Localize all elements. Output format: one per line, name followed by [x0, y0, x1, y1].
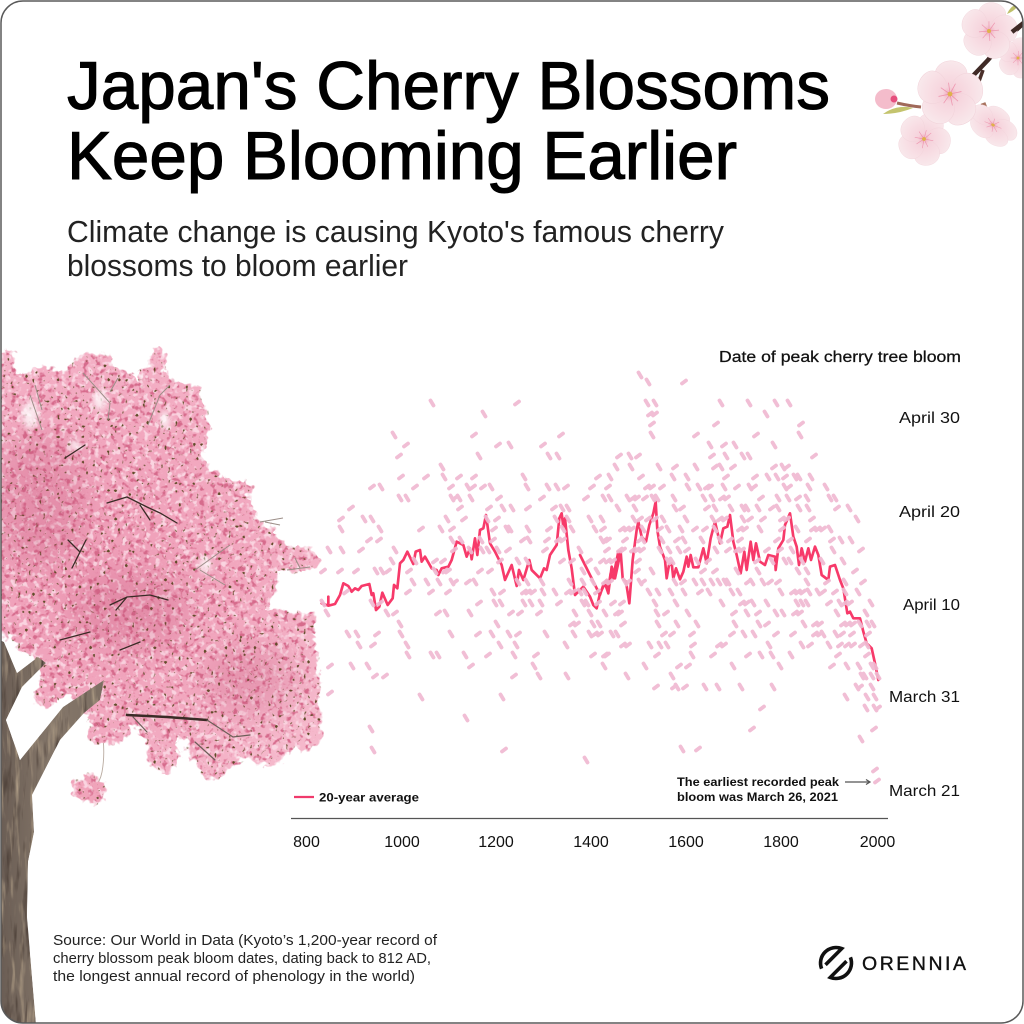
x axis with year labels: 1400 [573, 834, 609, 851]
scatter: yearly bloom dates drawn as petals [321, 372, 880, 782]
title [67, 48, 830, 194]
x axis with year labels: 1000 [384, 834, 420, 851]
y axis date labels: April 20 [899, 504, 960, 521]
callout: earliest recorded bloom [677, 775, 870, 804]
title: Keep Blooming Earlier [67, 118, 737, 194]
y axis date labels: April 30 [899, 410, 960, 427]
x axis with year labels: 1600 [668, 834, 704, 851]
y axis title: Date of peak cherry tree bloom [719, 349, 961, 366]
callout: earliest recorded bloom: bloom was March 26, 2021 [677, 790, 838, 804]
subtitle: blossoms to bloom earlier [67, 249, 408, 283]
x axis with year labels: 800 [293, 834, 320, 851]
line chart: 20-year average of bloom date [322, 502, 878, 680]
x axis with year labels: 1200 [478, 834, 514, 851]
x axis with year labels: 1800 [763, 834, 799, 851]
y axis date labels: March 21 [889, 783, 960, 800]
y axis date labels: April 10 [903, 597, 960, 614]
subtitle: Climate change is causing Kyoto's famous cherry [67, 215, 725, 249]
legend: 20-year average: 20-year average [319, 790, 419, 804]
callout: earliest recorded bloom: The earliest recorded peak [677, 775, 839, 789]
source note: cherry blossom peak bloom dates, dating back to 812 AD, [53, 951, 431, 967]
y axis date labels [889, 410, 960, 800]
x axis with year labels: 2000 [860, 834, 895, 851]
illustration: cherry tree [0, 345, 326, 1024]
source note: the longest annual record of phenology in the world) [53, 969, 415, 985]
illustration: cherry branch with blossoms [875, 0, 1024, 179]
logo: Orennia [821, 948, 966, 978]
source note [53, 933, 438, 985]
subtitle [67, 215, 725, 283]
title: Japan's Cherry Blossoms [67, 48, 830, 124]
x axis with year labels [291, 818, 895, 851]
logo: Orennia: ORENNIA [862, 953, 966, 975]
y axis date labels: March 31 [889, 689, 960, 706]
source note: Source: Our World in Data (Kyoto’s 1,200-year record of [53, 933, 438, 949]
